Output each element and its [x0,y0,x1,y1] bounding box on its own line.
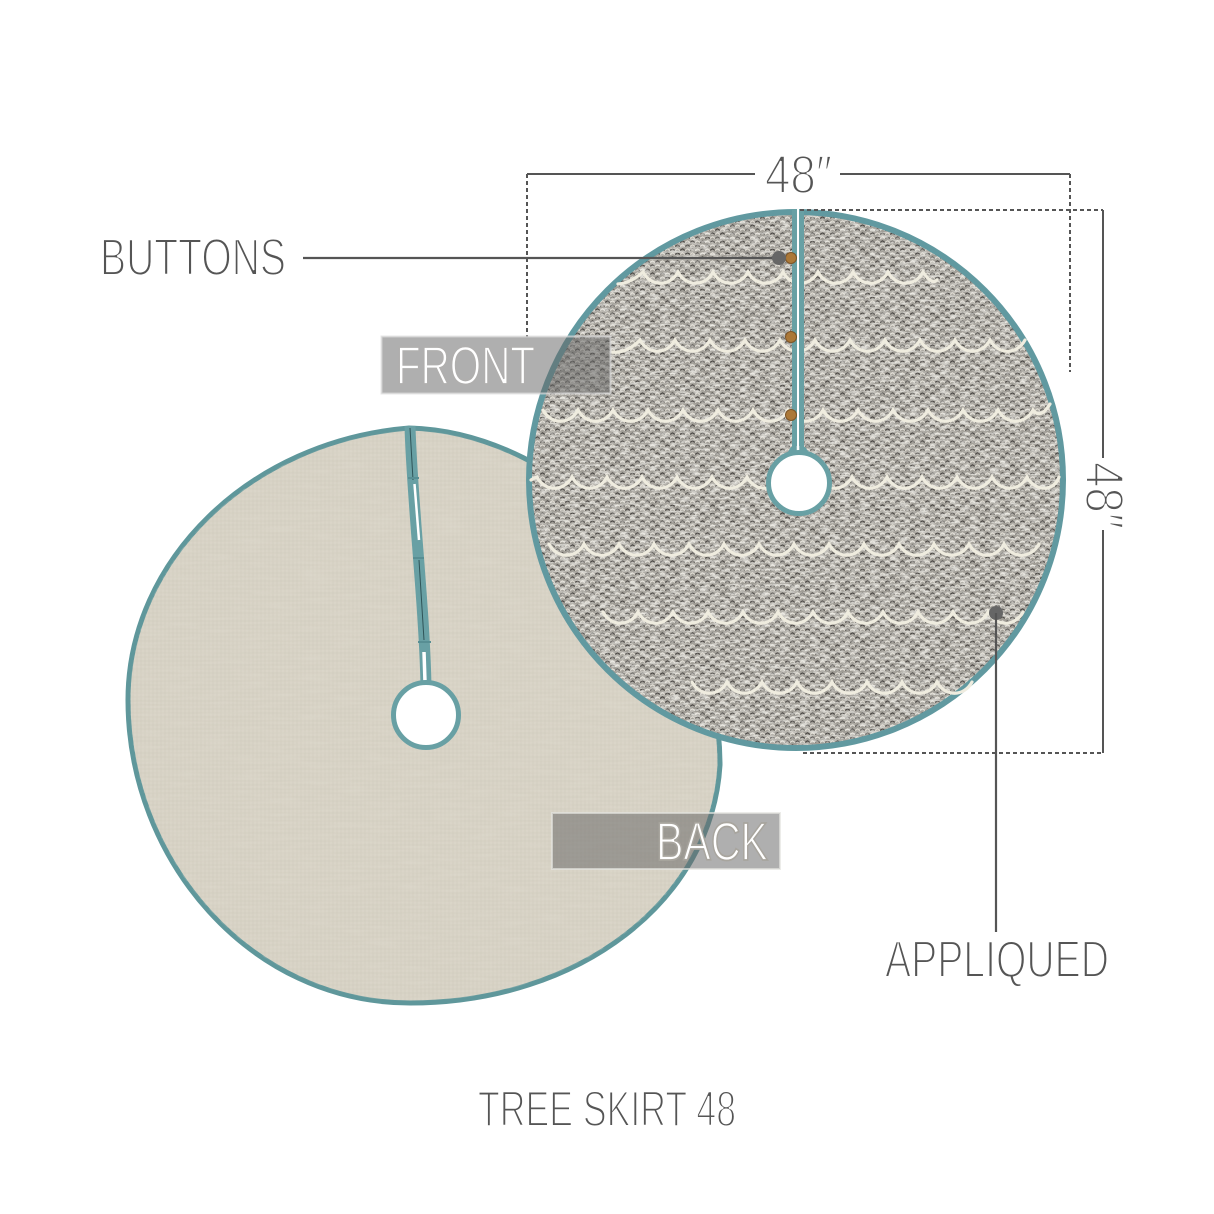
appliqued scallop rows [531,272,1059,693]
back placket seam [408,426,431,685]
linen texture [125,426,725,1006]
back neck hole [394,682,458,748]
label: front: FRONT [396,336,535,396]
back skirt [125,426,725,1006]
front placket seam [786,208,811,456]
callout: appliqued [885,606,1109,989]
infographic canvas [104,156,1122,1126]
callout: appliqued: APPLIQUED [885,931,1109,989]
label: back: BACK [656,812,768,872]
fabric speckle [527,211,1065,751]
callout: buttons: BUTTONS [100,229,286,287]
dimension: width 48 inches: 48″ [765,145,832,205]
back skirt body [128,428,720,1003]
caption: product name: TREE SKIRT 48 [478,1081,736,1137]
dimension: height 48 inches [800,210,1134,753]
label: back [552,812,780,872]
dimension: height 48 inches: 48″ [1074,462,1134,529]
front neck hole [768,452,830,514]
front skirt body [529,212,1063,748]
callout: buttons [100,229,786,287]
wooden buttons [786,252,796,420]
dimension: width 48 inches [527,145,1070,372]
front skirt [527,208,1065,751]
